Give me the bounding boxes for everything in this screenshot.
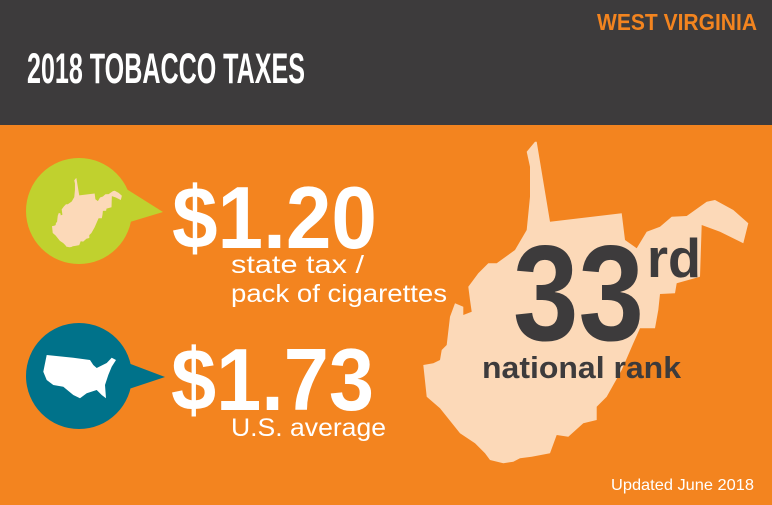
footer note: Updated June 2018 (611, 477, 754, 494)
icon: green bubble with WV (26, 158, 163, 264)
header bar (0, 0, 772, 125)
rank: 33 (513, 217, 644, 369)
state tax value: pack of cigarettes (231, 280, 447, 308)
map: West Virginia background (423, 142, 748, 463)
state tax caption: state tax / (231, 251, 364, 279)
icon: teal bubble with US (26, 323, 165, 429)
rank caption: national rank (482, 350, 682, 385)
state tax value (172, 168, 447, 308)
rank: rd (647, 227, 701, 289)
state label: WEST VIRGINIA (597, 9, 757, 35)
rank (482, 217, 701, 385)
title: 2018 TOBACCO TAXES (27, 45, 305, 93)
state tax value: $1.20 (172, 168, 377, 267)
US average caption: U.S. average (231, 414, 386, 442)
US average value: $1.73 (171, 330, 374, 429)
